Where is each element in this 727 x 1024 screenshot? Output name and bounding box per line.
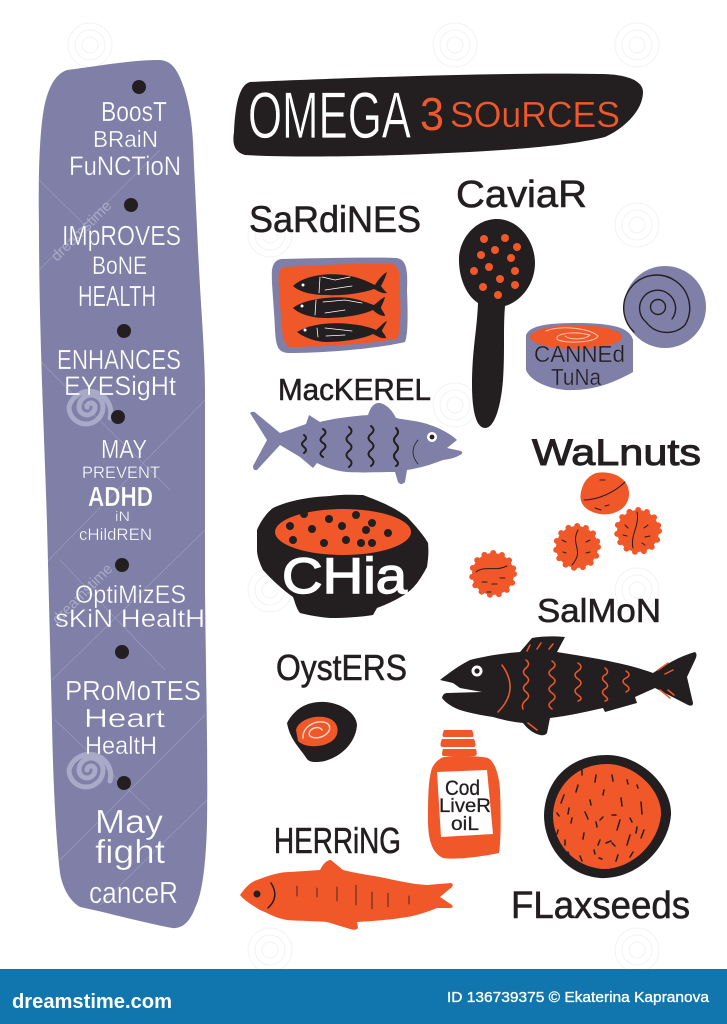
item: flaxseeds label: FLaxseeds bbox=[511, 885, 690, 927]
title: Omega 3 sources: SOuRCES bbox=[450, 94, 620, 135]
benefit: boost brain function: BRaiN bbox=[93, 126, 158, 152]
title: Omega 3 sources: 3 bbox=[420, 88, 444, 140]
walnut 3 bbox=[556, 526, 598, 568]
benefit: improves bone health: IMpROVES bbox=[62, 220, 181, 251]
bullet dots bbox=[111, 80, 146, 790]
benefit: optimizes skin health: OptiMizES bbox=[75, 581, 186, 609]
benefit: improves bone health bbox=[62, 220, 181, 313]
benefit: may prevent ADHD in children bbox=[79, 434, 160, 544]
title: Omega 3 sources bbox=[233, 74, 643, 156]
icon: chia bowl: CHia bbox=[282, 548, 407, 604]
item: mackerel label: MacKEREL bbox=[278, 372, 431, 407]
benefit: improves bone health: BoNE bbox=[92, 252, 147, 280]
benefit: optimizes skin health bbox=[55, 581, 205, 633]
icon: caviar spoon bbox=[459, 219, 535, 428]
item: oysters label: OystERS bbox=[276, 647, 407, 688]
icon: salmon fish bbox=[440, 636, 696, 735]
footer bar bbox=[0, 969, 727, 1024]
watermark text bbox=[48, 197, 116, 628]
icon: canned tuna: CANNEd bbox=[534, 341, 625, 367]
benefit: enhances eyesight: ENHANCES bbox=[57, 344, 181, 375]
benefit: may prevent ADHD in children: iN bbox=[115, 508, 130, 524]
benefit: enhances eyesight: EYESigHt bbox=[64, 371, 176, 401]
benefit: promotes heart health bbox=[65, 675, 201, 760]
icon: oyster bbox=[287, 702, 357, 762]
item: sardines label: SaRdiNES bbox=[249, 199, 421, 240]
icon: chia bowl bbox=[257, 495, 428, 618]
icon: mackerel fish bbox=[250, 403, 462, 484]
benefit: may prevent ADHD in children: PREVENT bbox=[82, 463, 160, 482]
fish trio bbox=[293, 272, 387, 342]
benefit: may prevent ADHD in children: MAY bbox=[101, 434, 147, 464]
benefit: may fight cancer bbox=[89, 803, 178, 910]
benefit: boost brain function: FuNCTioN bbox=[69, 151, 181, 181]
icon: sardine can bbox=[272, 258, 408, 353]
icon: flaxseeds bowl bbox=[544, 755, 671, 878]
watermark text: dreamstime bbox=[48, 197, 115, 265]
walnut 2 bbox=[617, 510, 659, 552]
benefit: may prevent ADHD in children: ADHD bbox=[88, 481, 153, 512]
icon: cod liver oil bottle: Cod bbox=[445, 777, 480, 800]
item: caviar label: CaviaR bbox=[456, 174, 587, 216]
title: Omega 3 sources: OMEGA bbox=[248, 78, 411, 152]
icon: cod liver oil bottle: LiveR bbox=[439, 796, 491, 817]
icon: cod liver oil bottle bbox=[428, 730, 501, 859]
tin body bbox=[526, 323, 633, 390]
item: herring label: HERRiNG bbox=[274, 820, 401, 861]
benefit: promotes heart health: HealtH bbox=[85, 732, 157, 760]
item: salmon label: SalMoN bbox=[537, 592, 661, 629]
benefit: may fight cancer: fight bbox=[95, 833, 165, 870]
watermark spirals bbox=[69, 391, 111, 787]
tin lid bbox=[624, 266, 706, 348]
benefit: improves bone health: HEALTH bbox=[78, 281, 156, 313]
icon: cod liver oil bottle: oiL bbox=[451, 814, 479, 835]
icon: walnuts bbox=[472, 472, 659, 595]
benefit: enhances eyesight bbox=[57, 344, 181, 401]
benefit: boost brain function bbox=[69, 96, 181, 181]
benefit: may fight cancer: canceR bbox=[89, 875, 178, 910]
item: walnuts label: WaLnuts bbox=[532, 432, 701, 473]
benefit: may prevent ADHD in children: cHildREN bbox=[79, 525, 152, 544]
benefit: boost brain function: BoosT bbox=[101, 96, 167, 127]
icon: herring fish bbox=[240, 860, 453, 930]
icon: canned tuna bbox=[526, 266, 706, 390]
benefit: may fight cancer: May bbox=[95, 803, 164, 840]
icon: canned tuna: TuNa bbox=[551, 364, 601, 390]
footer: site name: dreamstime.com bbox=[12, 991, 172, 1013]
footer: image id and credit: ID 136739375 © Ekaterina Kapranova bbox=[447, 989, 710, 1006]
panel: health benefits sidebar bbox=[39, 60, 207, 928]
benefit: promotes heart health: Heart bbox=[84, 703, 166, 733]
walnut 1 bbox=[580, 472, 629, 514]
benefit: promotes heart health: PRoMoTES bbox=[65, 675, 201, 706]
benefit: optimizes skin health: sKiN HealtH bbox=[55, 605, 205, 633]
watermark text: dreamstime bbox=[49, 560, 116, 628]
walnut 4 bbox=[472, 553, 514, 595]
